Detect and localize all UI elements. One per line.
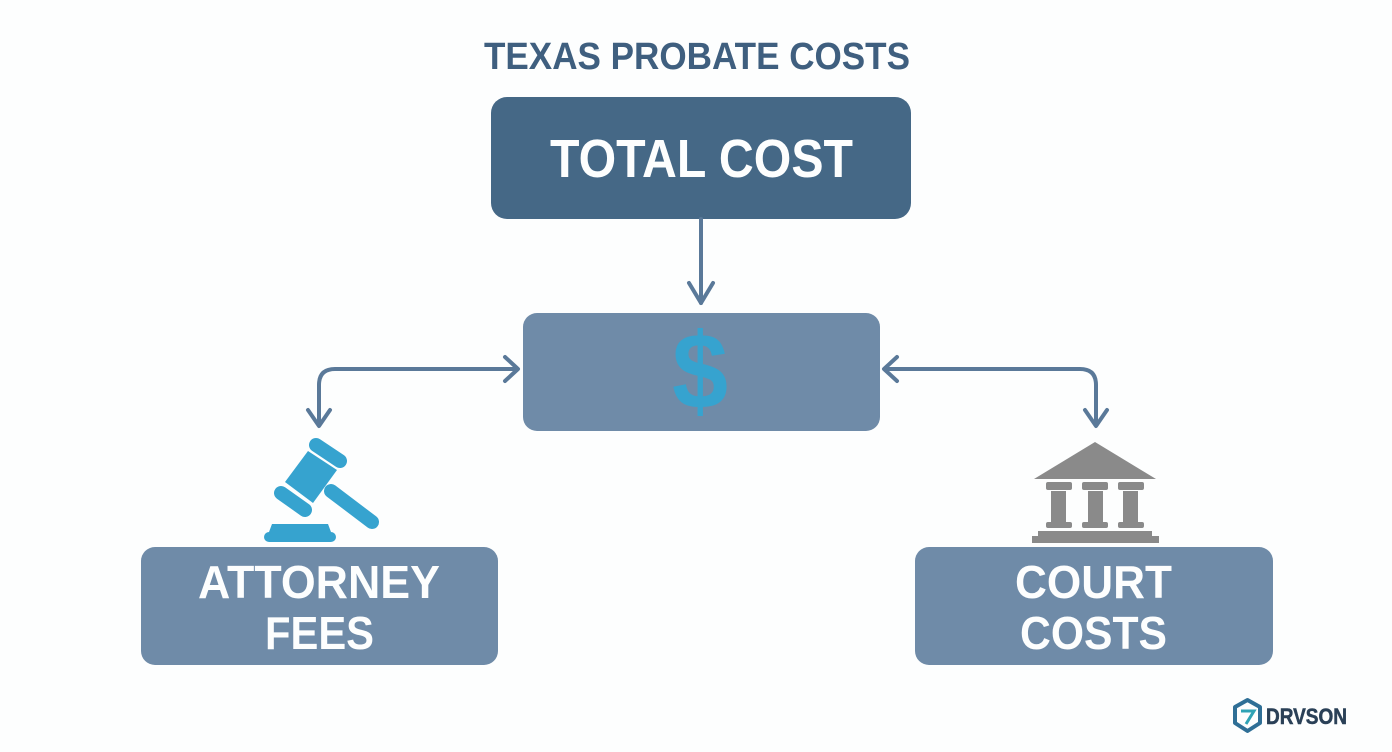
panel: total cost [491,97,911,219]
logo: drvson: DRVSON [1266,704,1347,729]
panel: dollar [523,310,880,431]
panel: attorney fees [141,547,498,665]
icon: gavel [264,445,372,542]
logo: drvson [1235,700,1347,731]
label: attorney fees: ATTORNEY [198,556,440,608]
label: court costs [1015,556,1172,659]
title: TEXAS PROBATE COSTS [484,36,910,78]
arrow: dollar panel to attorney fees [308,357,518,426]
label: court costs: COSTS [1020,607,1167,659]
icon: dollar sign: $ [672,310,728,431]
label: attorney fees: FEES [265,607,374,659]
label: attorney fees [198,556,440,659]
panel: court costs [915,547,1273,665]
icon: courthouse [1032,442,1159,543]
label: court costs: COURT [1015,556,1172,608]
arrow: total cost to dollar panel [689,219,713,303]
label: total cost: TOTAL COST [550,129,853,189]
arrow: dollar panel to court costs [884,357,1107,426]
